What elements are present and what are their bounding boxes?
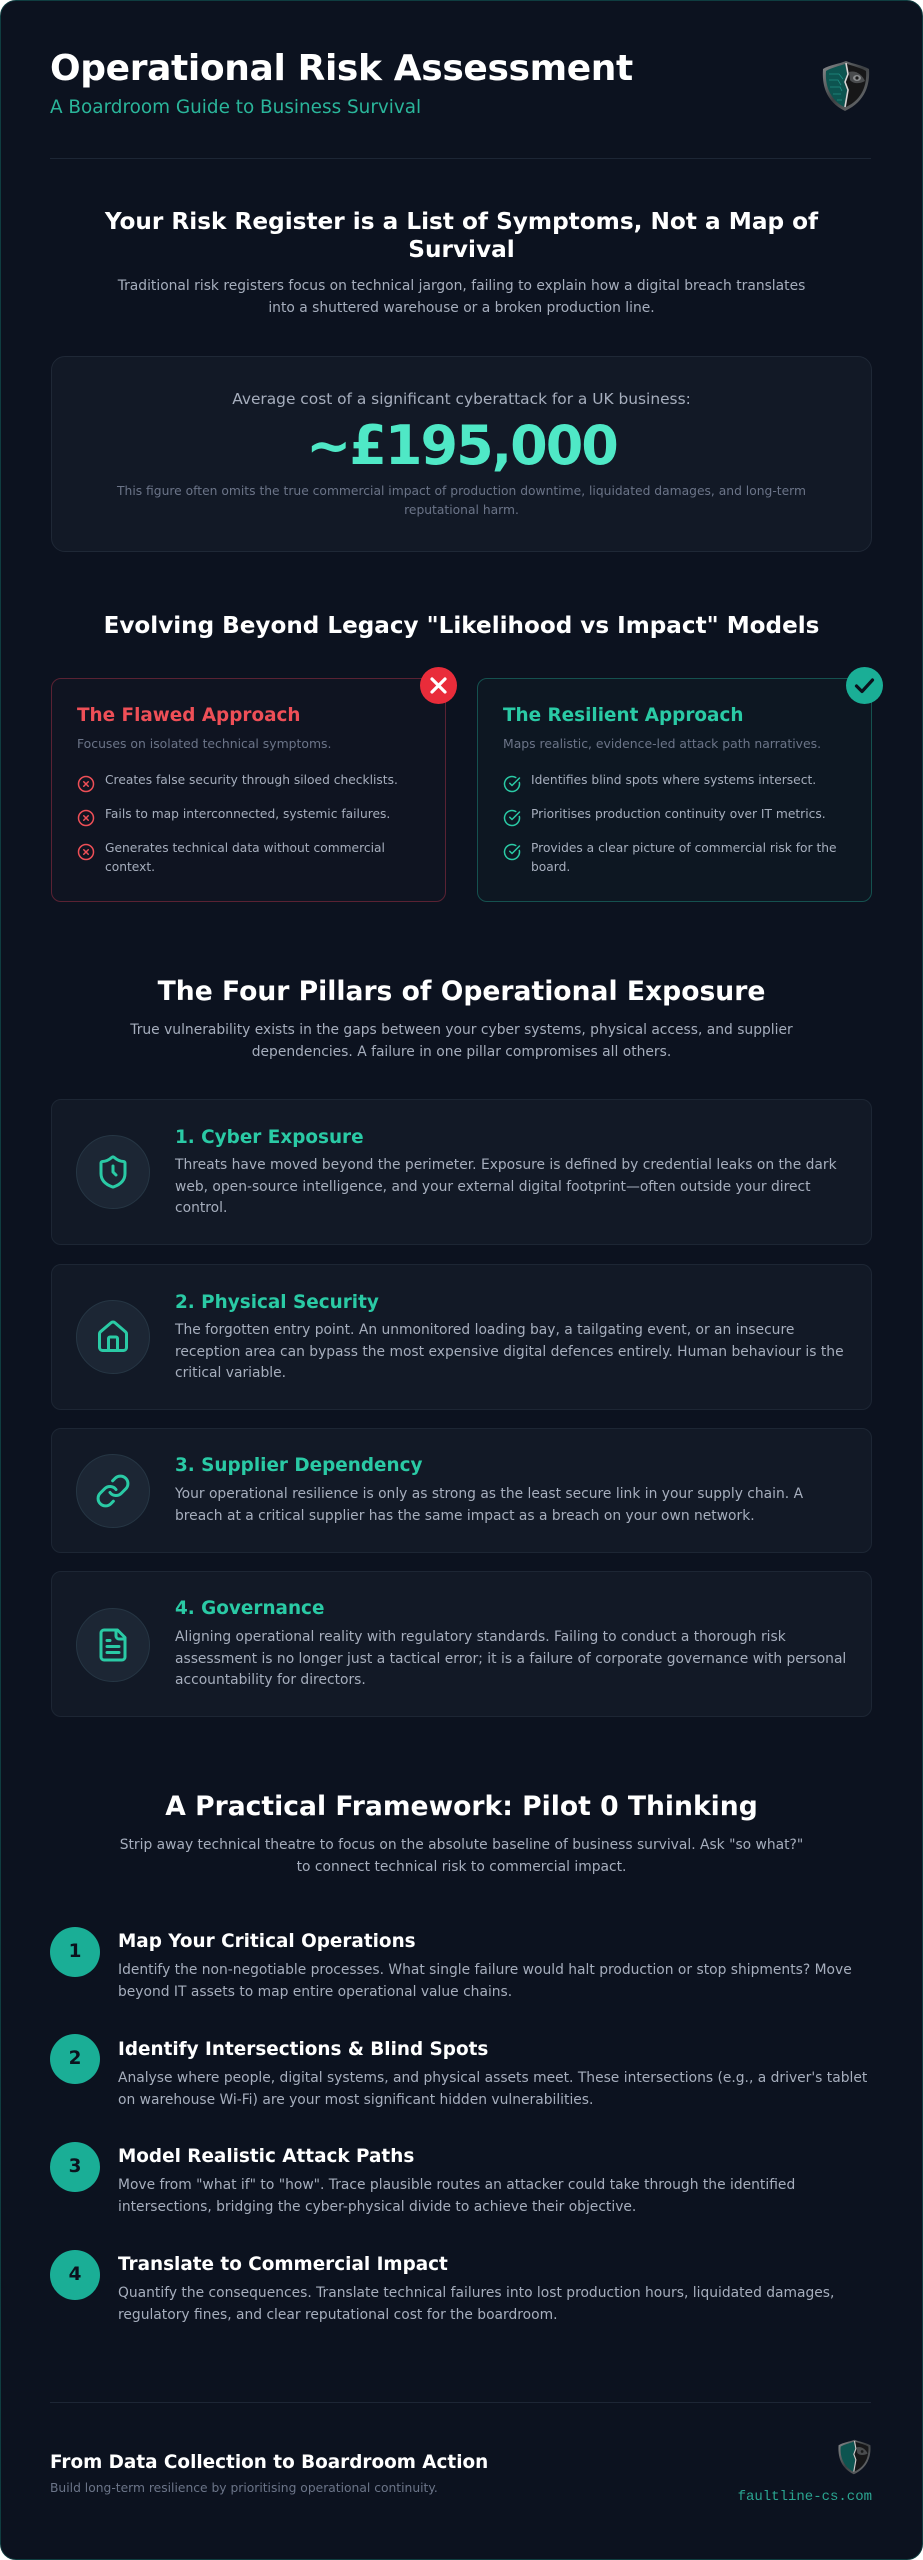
heading: step 3: Model Realistic Attack Paths xyxy=(118,2146,414,2167)
heading: step 4: Translate to Commercial Impact xyxy=(118,2254,448,2275)
text: practical framework intro: Strip away technical theatre to focus on the absolute baseline of business survival. Ask "so what?" xyxy=(120,1837,803,1853)
text: step 3: intersections, bridging the cyber-physical divide to achieve their objective. xyxy=(118,2199,636,2215)
heading: physical security: 2. Physical Security xyxy=(175,1292,379,1313)
text: governance: assessment is no longer just a tactical error; it is a failure of corporate governance with personal xyxy=(175,1651,846,1667)
text: four pillars intro: True vulnerability exists in the gaps between your cyber systems, physical access, and supplier xyxy=(130,1022,793,1038)
text: step 1: Identify the non-negotiable processes. What single failure would halt production or stop shipments? Move xyxy=(118,1962,852,1978)
heading: step 1: Map Your Critical Operations xyxy=(118,1931,416,1952)
text: step 2 xyxy=(118,2070,867,2108)
text: flawed approach summary: Focuses on isolated technical symptoms. xyxy=(77,736,331,751)
text: supplier dependency: breach at a critical supplier has the same impact as a breach on your own network. xyxy=(175,1508,755,1524)
icon: x circle xyxy=(78,810,94,826)
text: practical framework intro: to connect technical risk to commercial impact. xyxy=(297,1858,626,1874)
text: statistic caption: This figure often omits the true commercial impact of production downtime, liquidated damages, and long-term xyxy=(117,484,806,498)
text: physical security: The forgotten entry point. An unmonitored loading bay, a tailgating event, or an insecure xyxy=(175,1322,794,1338)
icon: teal check badge xyxy=(846,667,883,704)
text: physical security xyxy=(174,1322,844,1381)
text: resilient point 3: board. xyxy=(531,860,570,874)
heading: evolving beyond legacy: Evolving Beyond Legacy "Likelihood vs Impact" Models xyxy=(104,613,819,639)
heading: supplier dependency: 3. Supplier Dependency xyxy=(175,1455,422,1476)
statistic value: ~£195,000 xyxy=(306,414,617,477)
text: governance xyxy=(175,1629,846,1688)
text: flawed point 1: Creates false security through siloed checklists. xyxy=(105,773,398,787)
panel: the flawed approach xyxy=(51,678,446,902)
panel: pillar 4 governance xyxy=(51,1571,872,1717)
icon: x circle xyxy=(78,844,94,860)
text: cyber exposure: Threats have moved beyond the perimeter. Exposure is defined by credential leaks on the dark xyxy=(175,1157,837,1173)
text: statistic label: Average cost of a significant cyberattack for a UK business: xyxy=(232,390,691,408)
panel: pillar 2 physical security xyxy=(51,1264,872,1410)
text: resilient point 3: Provides a clear picture of commercial risk for the xyxy=(531,841,837,855)
icon: document xyxy=(76,1608,150,1682)
text: step 3: Move from "what if" to "how". Trace plausible routes an attacker could take through the identified xyxy=(118,2177,795,2193)
heading: flawed approach: The Flawed Approach xyxy=(77,705,300,726)
text: cyber exposure xyxy=(174,1157,837,1216)
text: risk register intro xyxy=(118,278,805,316)
icon: red x badge xyxy=(420,667,457,704)
text: physical security: critical variable. xyxy=(175,1365,286,1381)
text: resilient point 3 xyxy=(531,841,837,874)
text: resilient point 1: Identifies blind spots where systems intersect. xyxy=(531,773,816,787)
heading: cyber exposure: 1. Cyber Exposure xyxy=(175,1127,364,1148)
heading: risk register: Survival xyxy=(408,236,515,263)
list: resilient approach points xyxy=(504,773,837,874)
text: step 4 xyxy=(118,2285,834,2323)
heading: four pillars: The Four Pillars of Operational Exposure xyxy=(158,976,765,1007)
text: step 4: Quantify the consequences. Translate technical failures into lost production hours, liquidated damages, xyxy=(118,2285,834,2301)
panel: cost statistic xyxy=(51,356,872,552)
heading: step 2: Identify Intersections & Blind Spots xyxy=(118,2039,488,2060)
step 4 number xyxy=(50,2250,100,2300)
text: step 3 xyxy=(118,2177,795,2215)
text: supplier dependency xyxy=(175,1486,803,1524)
step 2 number xyxy=(50,2034,100,2084)
heading: risk register: Your Risk Register is a List of Symptoms, Not a Map of xyxy=(105,208,818,235)
text: statistic caption xyxy=(117,484,806,517)
panel: pillar 3 supplier dependency xyxy=(51,1428,872,1553)
text: flawed point 3 xyxy=(105,841,385,874)
icon: link xyxy=(76,1454,150,1528)
text: step 1 xyxy=(118,1962,852,2000)
text: statistic caption: reputational harm. xyxy=(404,503,519,517)
text: practical framework intro xyxy=(120,1837,803,1874)
subtitle: A Boardroom Guide to Business Survival xyxy=(50,97,421,118)
icon: footer shield logo xyxy=(838,2440,870,2474)
text: flawed point 3: context. xyxy=(105,860,155,874)
panel: pillar 1 cyber exposure xyxy=(51,1099,872,1245)
text: footer tagline: Build long-term resilience by prioritising operational continuity. xyxy=(50,2481,438,2495)
step 4 number: 4 xyxy=(69,2264,81,2285)
icon: header shield logo xyxy=(822,61,870,111)
icon: check circle xyxy=(504,776,520,792)
title: Operational Risk Assessment xyxy=(50,48,633,89)
step 2 number: 2 xyxy=(69,2048,81,2069)
text: governance: accountability for directors. xyxy=(175,1672,366,1688)
heading: footer: From Data Collection to Boardroom Action xyxy=(50,2452,488,2473)
icon: shield xyxy=(76,1135,150,1209)
text: step 4: regulatory fines, and clear reputational cost for the boardroom. xyxy=(118,2307,558,2323)
text: physical security: reception area can bypass the most expensive digital defences entirely. Human behaviour is the xyxy=(175,1344,844,1360)
list: flawed approach points xyxy=(78,773,398,874)
heading: risk register xyxy=(104,208,818,263)
text: governance: Aligning operational reality with regulatory standards. Failing to conduct a thorough risk xyxy=(175,1629,786,1645)
text: four pillars intro xyxy=(130,1022,793,1060)
heading: resilient approach: The Resilient Approach xyxy=(503,705,743,726)
text: step 2: Analyse where people, digital systems, and physical assets meet. These intersections (e.g., a driver's tablet xyxy=(118,2070,867,2086)
text: flawed point 3: Generates technical data without commercial xyxy=(105,841,385,855)
text: step 1: beyond IT assets to map entire operational value chains. xyxy=(118,1984,512,2000)
text: supplier dependency: Your operational resilience is only as strong as the least secure link in your supply chain. A xyxy=(175,1486,803,1502)
icon: x circle xyxy=(78,776,94,792)
icon: check circle xyxy=(504,810,520,826)
icon: house xyxy=(76,1300,150,1374)
text: website: faultline-cs.com xyxy=(738,2489,872,2505)
step 3 number: 3 xyxy=(69,2156,81,2177)
text: risk register intro: into a shuttered warehouse or a broken production line. xyxy=(268,300,655,316)
heading: practical framework: A Practical Framework: Pilot 0 Thinking xyxy=(165,1791,758,1822)
text: resilient approach summary: Maps realistic, evidence-led attack path narratives. xyxy=(503,736,821,751)
text: four pillars intro: dependencies. A failure in one pillar compromises all others. xyxy=(252,1044,671,1060)
text: step 2: on warehouse Wi-Fi) are your most significant hidden vulnerabilities. xyxy=(118,2092,593,2108)
step 1 number xyxy=(50,1927,100,1977)
icon: check circle xyxy=(504,844,520,860)
step 1 number: 1 xyxy=(69,1941,81,1962)
text: resilient point 2: Prioritises production continuity over IT metrics. xyxy=(531,807,826,821)
text: cyber exposure: web, open-source intelligence, and your external digital footprint—often outside your direct xyxy=(175,1179,811,1195)
text: risk register intro: Traditional risk registers focus on technical jargon, failing to explain how a digital breach translates xyxy=(118,278,805,294)
heading: governance: 4. Governance xyxy=(175,1598,324,1619)
text: cyber exposure: control. xyxy=(175,1200,227,1216)
step 3 number xyxy=(50,2142,100,2192)
text: flawed point 2: Fails to map interconnected, systemic failures. xyxy=(105,807,390,821)
panel: the resilient approach xyxy=(477,678,872,902)
